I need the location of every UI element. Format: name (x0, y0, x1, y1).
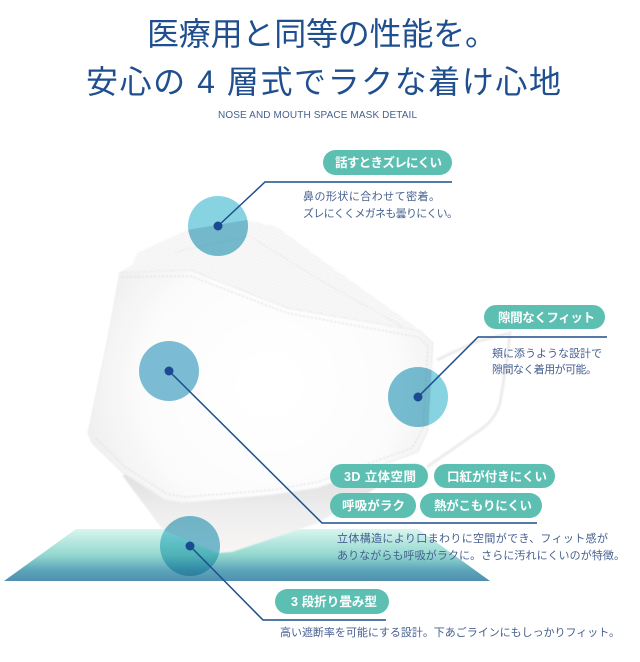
leader lines (169, 182, 607, 620)
pill: lipstick: 口紅が付きにくい (447, 469, 547, 484)
circle: side (388, 367, 448, 427)
gradient floor (4, 529, 490, 581)
mask illustration (88, 220, 510, 553)
pill: heat (420, 493, 542, 518)
callout: folding (275, 589, 620, 639)
text: cheek fit description: 頬に添うような設計で (492, 346, 602, 360)
circle: chin (160, 516, 220, 576)
nose stitching (175, 236, 405, 328)
pill: speaking: 話すときズレにくい (335, 155, 442, 170)
callout: 3D space (330, 464, 625, 562)
text: cheek fit description (492, 346, 602, 376)
text: nose fit description: ズレにくくメガネも曇りにくい。 (303, 206, 458, 220)
pill: three-fold: 3 段折り畳み型 (291, 594, 377, 609)
text: cheek fit description: 隙間なく着用が可能。 (492, 362, 597, 376)
pill: no gaps: 隙間なくフィット (498, 311, 595, 325)
pill: easy breathing: 呼吸がラク (342, 498, 405, 513)
text: 3D space description (337, 531, 625, 562)
main panel (88, 270, 433, 503)
pill: 3D space (330, 464, 428, 488)
callout: nose fit (303, 150, 458, 220)
text: nose fit description (303, 189, 458, 220)
circle: cheek (139, 341, 199, 401)
title (86, 16, 561, 100)
title: 安心の 4 層式でラクな着け心地 (86, 64, 561, 100)
callout dots (164, 222, 422, 550)
text: 3D space description: ありながらも呼吸がラクに。さらに汚れにくいのが特徴。 (337, 548, 625, 562)
text: folding description: 高い遮断率を可能にする設計。下あごラインにもしっかりフィット。 (280, 625, 620, 639)
callout circles (139, 196, 448, 576)
text: nose fit description: 鼻の形状に合わせて密着。 (303, 189, 440, 203)
pill: lipstick (434, 464, 555, 488)
pill: heat: 熱がこもりにくい (434, 498, 532, 513)
nose section (120, 220, 433, 343)
circle: nose (188, 196, 248, 256)
pill: easy breathing (330, 493, 416, 518)
pill: speaking (323, 150, 452, 175)
lower flap (122, 463, 418, 553)
ear loops (427, 333, 510, 467)
pill: three-fold (275, 589, 389, 614)
callout: cheek fit (484, 305, 605, 376)
title: 医療用と同等の性能を。 (147, 16, 497, 52)
pill: 3D space: 3D 立体空間 (344, 469, 416, 484)
stitching (96, 276, 428, 497)
text: 3D space description: 立体構造により口まわりに空間ができ、フィット感が (337, 531, 608, 545)
subtitle: NOSE AND MOUTH SPACE MASK DETAIL (218, 110, 417, 121)
